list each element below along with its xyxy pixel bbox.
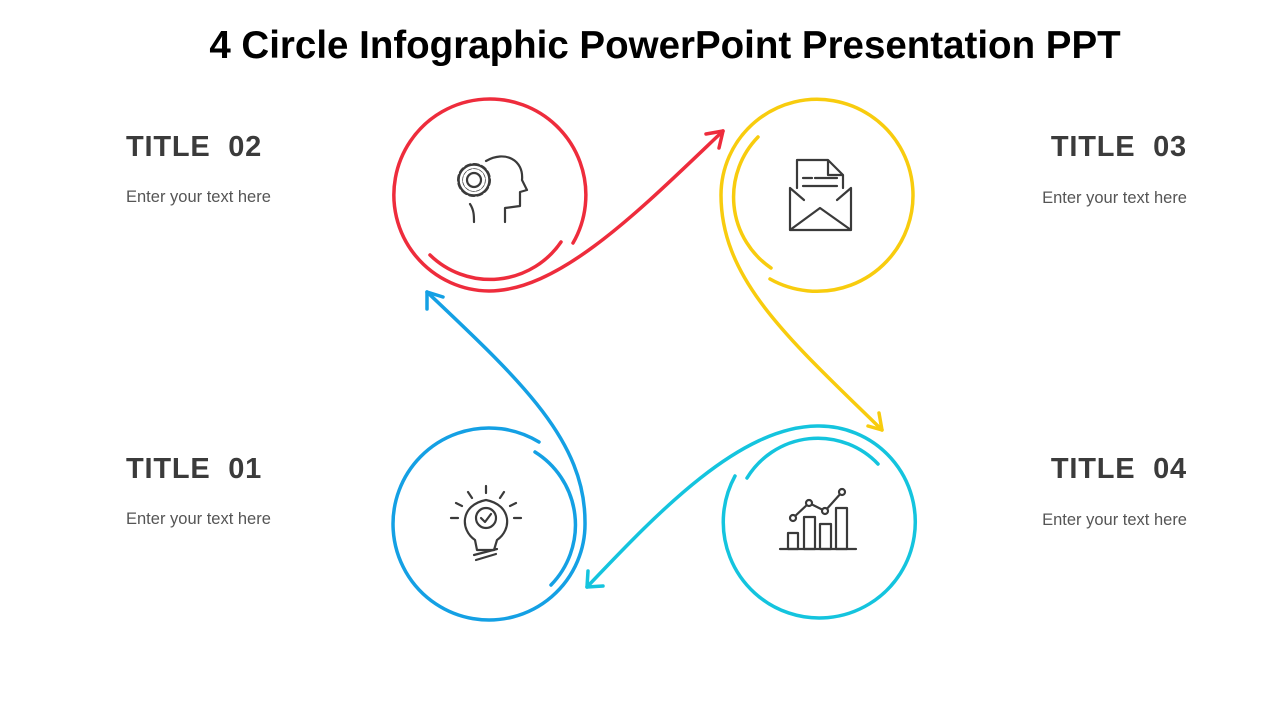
icon: head with gear [460, 156, 527, 222]
text: title 03: Enter your text here [1042, 189, 1187, 207]
text: title 01: Enter your text here [126, 510, 271, 528]
circle cyan with arrow [587, 426, 915, 618]
icon: light bulb [451, 486, 521, 560]
text: title 02: Enter your text here [126, 188, 271, 206]
title: 4 Circle Infographic PowerPoint Presentation PPT [209, 24, 1121, 67]
circle yellow with arrow [721, 99, 913, 430]
icon: envelope with letter [790, 160, 851, 230]
circle red with arrow [394, 99, 723, 291]
circle blue with arrow [393, 292, 585, 620]
heading: title 04: TITLE 04 [1051, 453, 1187, 485]
heading: title 02: TITLE 02 [126, 131, 262, 163]
text: title 04: Enter your text here [1042, 511, 1187, 529]
heading: title 03: TITLE 03 [1051, 131, 1187, 163]
heading: title 01: TITLE 01 [126, 453, 262, 485]
icon: bar chart [780, 489, 856, 549]
